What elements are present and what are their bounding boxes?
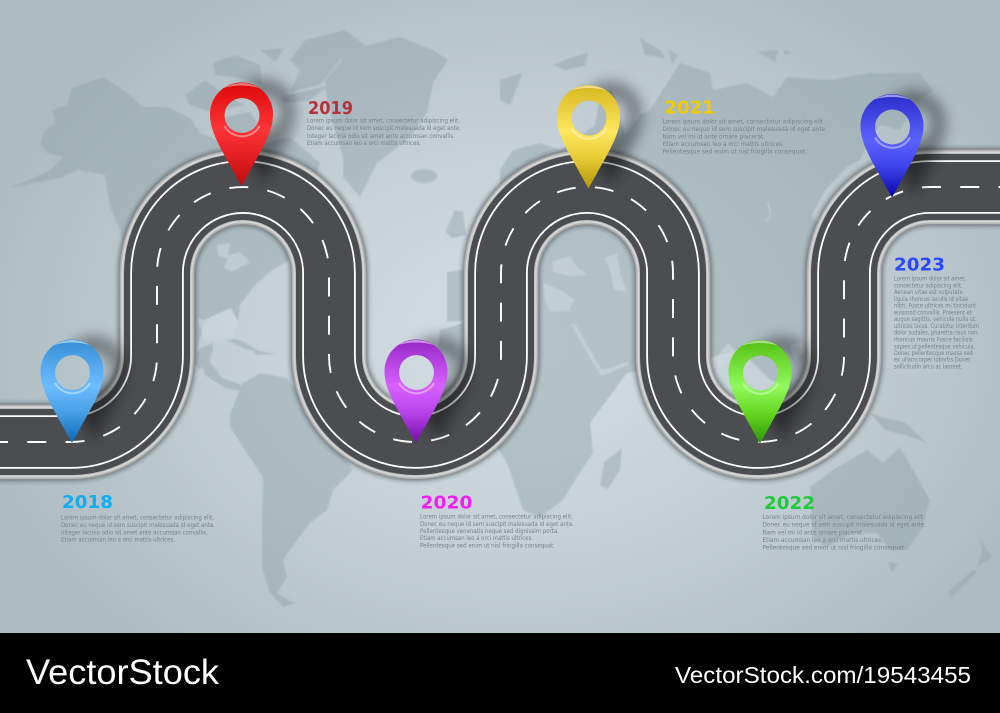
map: Arctic Russia islands [553,38,793,70]
text block: 2018: Etiam accumsan leo a orci mattis ultrices. [61,536,175,544]
text block: 2023: ex ullamcorper lobortis.Donec [894,357,971,364]
sea: Red Sea [571,324,628,376]
road centre dashes [0,187,1000,442]
year 2022: 2022 [764,493,815,514]
map: Arctic islands [185,30,365,135]
footer band [0,633,1000,713]
text block: 2021: Nam vel mi id ante ornare placerat. [662,134,765,140]
sea: Gulf of Mexico [197,308,238,340]
text block: 2022: Donec eu neque id sem suscipit malesuada id eget ante. [762,522,926,529]
road shadow [0,187,1000,442]
pin: 2021 yellow [557,82,642,188]
year 2021: 2021 [664,98,714,118]
year 2018: 2018 [62,492,113,513]
pin: 2022 green [728,337,814,444]
text block: 2023: ligula rhoncus iaculis id vitae [894,296,968,303]
map: inland seas [197,203,805,376]
map: Madagascar [600,448,622,489]
text block: 2019: Lorem ipsum dolor sit amet, consectetur adipiscing elit. [307,118,460,125]
sea: Caspian [604,253,627,292]
road asphalt [0,187,1000,442]
text block: 2023 [894,255,979,370]
map: North America [8,77,320,370]
sea: Mediterranean [543,283,575,312]
text block: 2020: Pellentesque venenatis neque sed dignissim porta. [420,528,559,535]
sea: Japan sliver [766,203,771,223]
year 2023: 2023 [894,255,945,276]
map: New Guinea and islands [870,413,927,443]
sea: Great Lakes [217,243,250,272]
map: South America [230,373,353,607]
pin: 2018 light blue [40,336,126,443]
map: Australia [810,447,930,550]
map: Scandinavia and north Europe [500,73,522,105]
text block: 2023: dolor sodales, pharetra risus non, [894,330,979,337]
world map [8,30,992,607]
text block: 2018 [61,492,215,544]
year 2020: 2020 [420,492,472,514]
text block: 2020: Lorem ipsum dolor sit amet, consectetur adipiscing elit. [420,514,573,521]
map: Greenland [325,37,448,197]
text block: 2020: Etiam accumsan leo a orci mattis ultrices. [420,535,533,542]
map: Iceland [411,169,437,183]
text block: 2020: Pellentesque sed enim ut nisl fringilla consequat. [420,542,555,550]
text block: 2023: euismod convallis. Praesent et [894,309,972,316]
map: Caribbean [222,338,277,355]
sea: Persian gulf and bay [715,342,805,368]
text block: 2023: nibh. Fusce ultrices mi tincidunt [894,303,976,310]
map: Tasmania and New Zealand [888,540,992,597]
text block: 2023: Lorem ipsum dolor sit amet, [894,276,966,283]
text block: 2021 [662,98,827,156]
map: Africa [430,300,627,517]
map: Central America [197,343,243,392]
text block: 2019 [307,98,461,147]
text block: 2020 [420,492,574,550]
text block: 2022: Etiam accumsan leo a orci mattis ultrices. [762,537,883,544]
text block: 2018: Donec eu neque id sem suscipit malesuada id eget ante. [61,522,215,529]
text block: 2023: augue sagittis, vehicula nulla ut, [894,316,977,323]
text block: 2018: Integer lacinia odio sit amet ante accumsan convallis. [61,530,208,536]
text block: 2022: Nam vel mi id ante ornare placerat. [762,530,864,536]
road metal barrier [0,187,1000,442]
text block: 2022 [762,493,926,552]
footer url: VectorStock.com/19543455 [675,662,971,688]
text block: 2021: Etiam accumsan leo a orci mattis ultrices. [662,141,784,148]
text block: 2021: Pellentesque sed enim ut nisl fringilla consequat. [662,148,807,156]
text block: 2023: consectetur adipiscing elit. [894,282,963,289]
pin: 2020 purple [384,336,470,443]
text block: 2022: Pellentesque sed enim ut nisl fringilla consequat. [762,544,906,552]
pin: 2023 blue [860,91,946,198]
text block: 2018: Lorem ipsum dolor sit amet, consectetur adipiscing elit. [61,515,214,522]
text block: 2023: Aenean vitae est vulputate [894,289,963,296]
text block: 2019: Integer lacinia odio sit amet ante accumsan convallis. [307,133,455,140]
text block: 2019: Donec eu neque id sem suscipit malesuada id eget ante. [307,125,461,132]
winding road [0,187,1000,442]
sea: Black Sea [552,256,588,276]
map: UK and Iberia [445,210,480,322]
text block: 2023: rhoncus mauris Fusce facilisis [894,336,973,343]
text block: 2022: Lorem ipsum dolor sit amet, consectetur adipiscing elit. [762,514,925,521]
text block: 2023: ultrices lacus. Curabitur interdum [894,323,979,330]
road edge lines [0,187,1000,442]
text block: 2019: Etiam accumsan leo a orci mattis ultrices. [307,140,421,147]
pin: 2019 red [210,80,295,186]
year 2019: 2019 [308,98,353,119]
text block: 2021: Lorem ipsum dolor sit amet, consectetur adipiscing elit. [662,118,825,125]
footer logo: VectorStock [26,653,220,692]
text block: 2023: sollicitudin arcu ac laoreet. [894,363,962,370]
text block: 2021: Donec eu neque id sem suscipit malesuada id eget ante. [662,126,827,133]
text block: 2023: Donec pellentesque massa sed [894,350,973,357]
text block: 2020: Donec eu neque id sem suscipit malesuada id eget ante. [420,521,574,528]
map: Eurasia [463,63,933,400]
text block: 2023: sapien id pellentesque vehicula. [894,343,975,350]
